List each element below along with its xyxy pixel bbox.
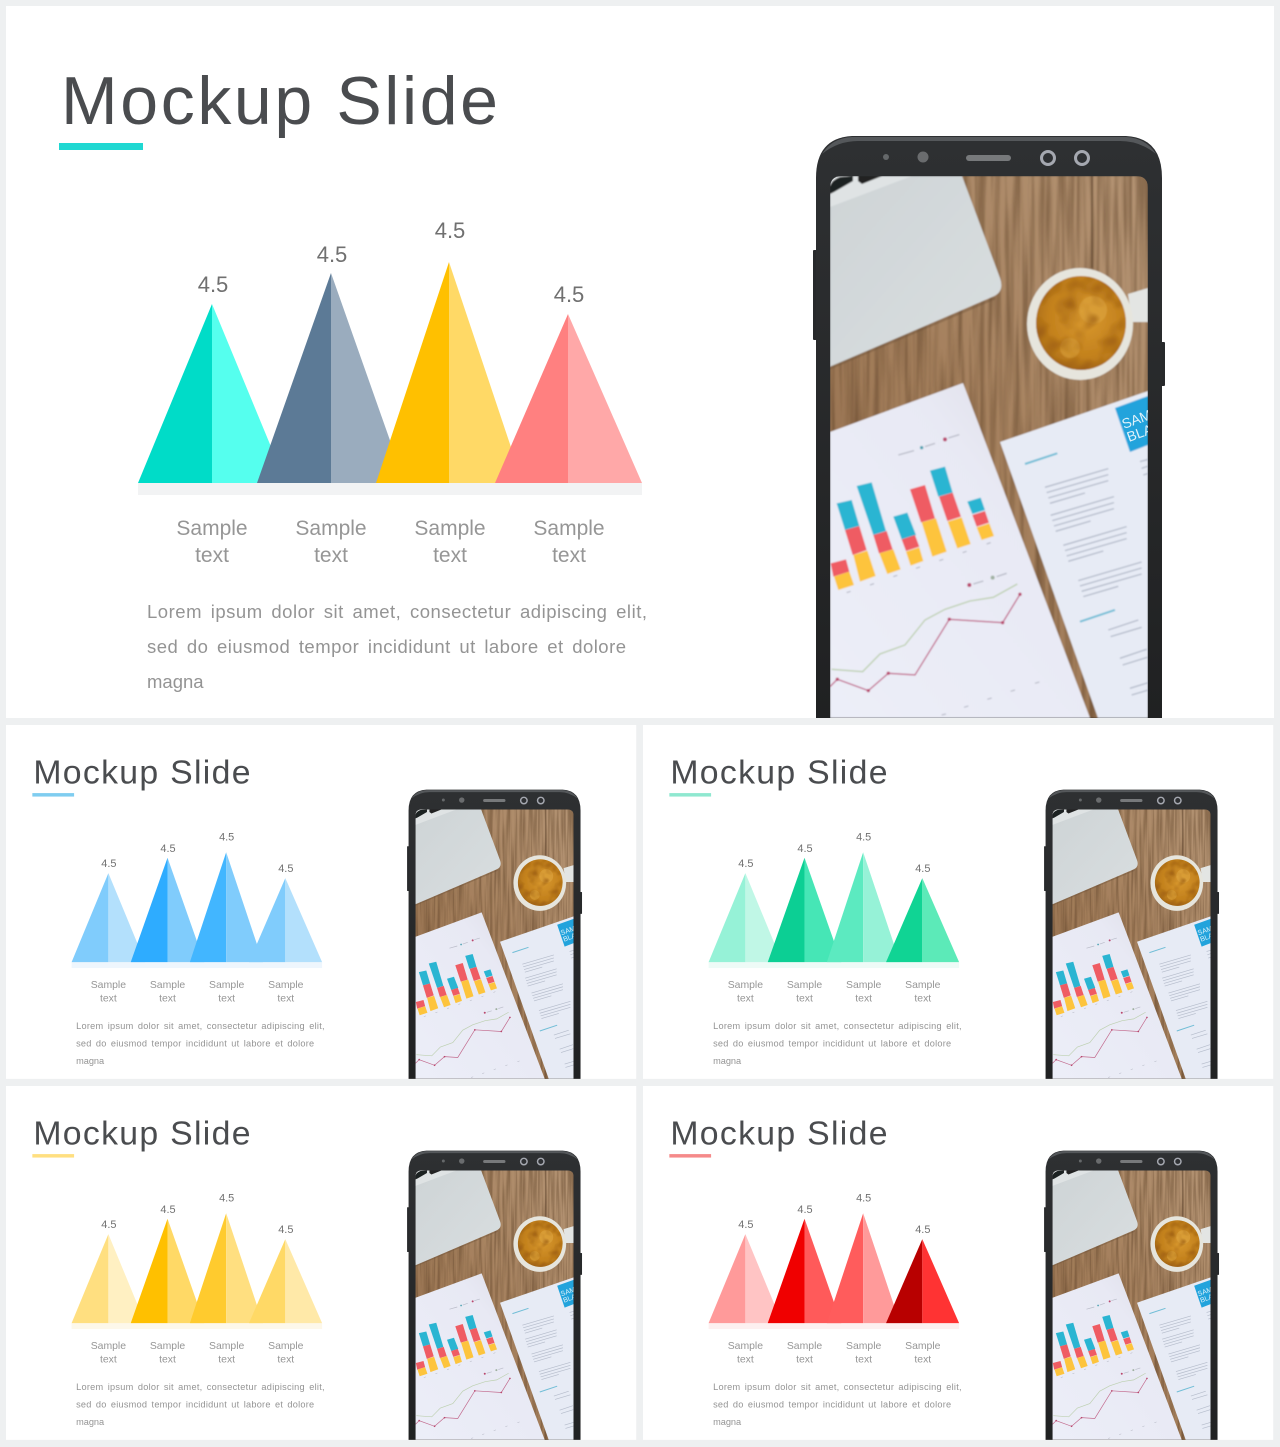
category labels: Sample [414, 517, 486, 540]
values: 4.5 [797, 843, 813, 855]
body text: magna [76, 1056, 105, 1066]
phone mockup [407, 790, 582, 1079]
title: Mockup Slide [33, 754, 251, 792]
category labels: Sample [150, 1341, 185, 1352]
body text: Lorem ipsum dolor sit amet, consectetur adipiscing elit, [147, 601, 647, 622]
slide background [6, 1086, 636, 1440]
body text: magna [147, 671, 204, 692]
triangle 2 [131, 1219, 204, 1323]
category labels: Sample [268, 980, 304, 991]
body text: Lorem ipsum dolor sit amet, consectetur adipiscing elit, [713, 1021, 962, 1031]
body text: sed do eiusmod tempor incididunt ut labore et dolore [147, 636, 626, 657]
phone mockup: SAM [1120, 406, 1154, 432]
triangle chart [709, 1192, 959, 1329]
category labels [728, 980, 941, 1004]
category labels: Sample [91, 980, 126, 991]
values: 4.5 [160, 1204, 176, 1216]
category labels: Sample [728, 1341, 763, 1352]
triangle chart [138, 218, 642, 495]
category labels: text [855, 1354, 872, 1365]
category labels: text [100, 1354, 117, 1365]
category labels: text [796, 993, 813, 1004]
triangle 4 [249, 1239, 322, 1323]
triangle 3 [376, 262, 523, 483]
phone mockup [1044, 1151, 1219, 1440]
values: 4.5 [856, 1192, 871, 1204]
triangle 1 [138, 304, 286, 483]
slide background [6, 725, 636, 1079]
phone mockup: BLA [1199, 932, 1214, 944]
category labels: text [218, 1354, 235, 1365]
category labels: Sample [728, 980, 763, 991]
category labels: Sample [209, 1341, 245, 1352]
values [101, 1192, 293, 1236]
category labels: text [433, 544, 467, 567]
triangle 2 [257, 273, 405, 483]
values [738, 1192, 930, 1236]
phone mockup: BLA [1199, 1293, 1214, 1305]
phone mockup: SAM [1197, 925, 1214, 937]
body text: sed do eiusmod tempor incididunt ut labore et dolore [713, 1400, 951, 1410]
triangle 3 [827, 1213, 900, 1323]
category labels: text [277, 993, 294, 1004]
body text [76, 1382, 325, 1427]
triangle chart [709, 831, 959, 968]
values: 4.5 [915, 1224, 930, 1236]
triangle 1 [72, 1234, 145, 1323]
triangle chart [72, 1192, 322, 1329]
phone mockup [407, 1151, 582, 1440]
category labels: Sample [91, 1341, 126, 1352]
category labels: Sample [905, 980, 941, 991]
chart base [709, 1323, 959, 1329]
triangle 4 [886, 878, 959, 962]
values: 4.5 [915, 863, 930, 875]
triangle chart [72, 831, 322, 968]
panel: yellow slide [6, 1086, 636, 1440]
category labels: text [737, 993, 754, 1004]
body text [147, 601, 647, 692]
title underline [32, 793, 74, 797]
category labels: Sample [176, 517, 248, 540]
title underline [669, 1154, 711, 1158]
category labels [91, 1341, 304, 1365]
phone mockup: BLA [562, 932, 577, 944]
category labels: Sample [846, 1341, 882, 1352]
triangle 1 [709, 1234, 782, 1323]
values: 4.5 [198, 272, 228, 297]
values [198, 218, 584, 307]
values [738, 831, 930, 875]
triangle 1 [709, 873, 782, 962]
category labels [728, 1341, 941, 1365]
phone mockup [813, 136, 1165, 718]
category labels: text [314, 544, 348, 567]
values: 4.5 [278, 863, 293, 875]
slide background [643, 725, 1273, 1079]
values: 4.5 [160, 843, 176, 855]
phone mockup: SAM [560, 1286, 577, 1298]
category labels: Sample [787, 980, 822, 991]
panel: green slide [643, 725, 1273, 1079]
phone mockup [1044, 790, 1219, 1079]
chart base [138, 483, 642, 495]
category labels: Sample [295, 517, 367, 540]
category labels: text [100, 993, 117, 1004]
body text [713, 1021, 962, 1066]
category labels: text [159, 993, 176, 1004]
phone mockup: SAM [1197, 1286, 1214, 1298]
category labels: text [914, 1354, 931, 1365]
title underline [59, 143, 143, 150]
chart base [709, 962, 959, 968]
phone mockup: BLA [562, 1293, 577, 1305]
panel: red slide [643, 1086, 1273, 1440]
category labels: Sample [846, 980, 882, 991]
category labels: text [737, 1354, 754, 1365]
title: Mockup Slide [670, 754, 888, 792]
values: 4.5 [856, 831, 871, 843]
triangle 3 [190, 1213, 263, 1323]
body text: magna [76, 1417, 105, 1427]
body text: Lorem ipsum dolor sit amet, consectetur adipiscing elit, [76, 1382, 325, 1392]
chart base [72, 1323, 322, 1329]
title underline [669, 793, 711, 797]
triangle 4 [495, 314, 642, 483]
slide background [643, 1086, 1273, 1440]
values [101, 831, 293, 875]
values: 4.5 [219, 1192, 234, 1204]
slide background [6, 6, 1274, 718]
body text: magna [713, 1417, 742, 1427]
triangle 2 [131, 858, 204, 962]
values: 4.5 [435, 218, 465, 243]
category labels: text [277, 1354, 294, 1365]
triangle 4 [249, 878, 322, 962]
category labels: text [796, 1354, 813, 1365]
phone mockup: SAM [560, 925, 577, 937]
values: 4.5 [219, 831, 234, 843]
values: 4.5 [554, 282, 584, 307]
body text: sed do eiusmod tempor incididunt ut labore et dolore [76, 1400, 314, 1410]
body text [76, 1021, 325, 1066]
category labels [91, 980, 304, 1004]
triangle 2 [768, 1219, 841, 1323]
triangle 3 [190, 852, 263, 962]
values: 4.5 [738, 1219, 753, 1231]
category labels: Sample [533, 517, 605, 540]
values: 4.5 [738, 858, 753, 870]
chart base [72, 962, 322, 968]
category labels [176, 517, 605, 567]
values: 4.5 [317, 242, 347, 267]
category labels: Sample [150, 980, 185, 991]
values: 4.5 [797, 1204, 813, 1216]
values: 4.5 [101, 1219, 116, 1231]
body text: sed do eiusmod tempor incididunt ut labore et dolore [76, 1039, 314, 1049]
values: 4.5 [101, 858, 116, 870]
title: Mockup Slide [670, 1115, 888, 1153]
title: Mockup Slide [33, 1115, 251, 1153]
category labels: Sample [905, 1341, 941, 1352]
body text: magna [713, 1056, 742, 1066]
panel: main slide [6, 6, 1274, 718]
triangle 3 [827, 852, 900, 962]
category labels: text [159, 1354, 176, 1365]
body text: sed do eiusmod tempor incididunt ut labore et dolore [713, 1039, 951, 1049]
category labels: text [914, 993, 931, 1004]
phone mockup: BLA [1125, 421, 1156, 445]
category labels: Sample [268, 1341, 304, 1352]
category labels: Sample [787, 1341, 822, 1352]
panel: blue slide [6, 725, 636, 1079]
triangle 4 [886, 1239, 959, 1323]
title: Mockup Slide [61, 63, 498, 139]
category labels: text [855, 993, 872, 1004]
body text: Lorem ipsum dolor sit amet, consectetur adipiscing elit, [713, 1382, 962, 1392]
body text: Lorem ipsum dolor sit amet, consectetur adipiscing elit, [76, 1021, 325, 1031]
values: 4.5 [278, 1224, 293, 1236]
category labels: text [552, 544, 586, 567]
triangle 1 [72, 873, 145, 962]
category labels: Sample [209, 980, 245, 991]
triangle 2 [768, 858, 841, 962]
title underline [32, 1154, 74, 1158]
body text [713, 1382, 962, 1427]
category labels: text [195, 544, 229, 567]
category labels: text [218, 993, 235, 1004]
